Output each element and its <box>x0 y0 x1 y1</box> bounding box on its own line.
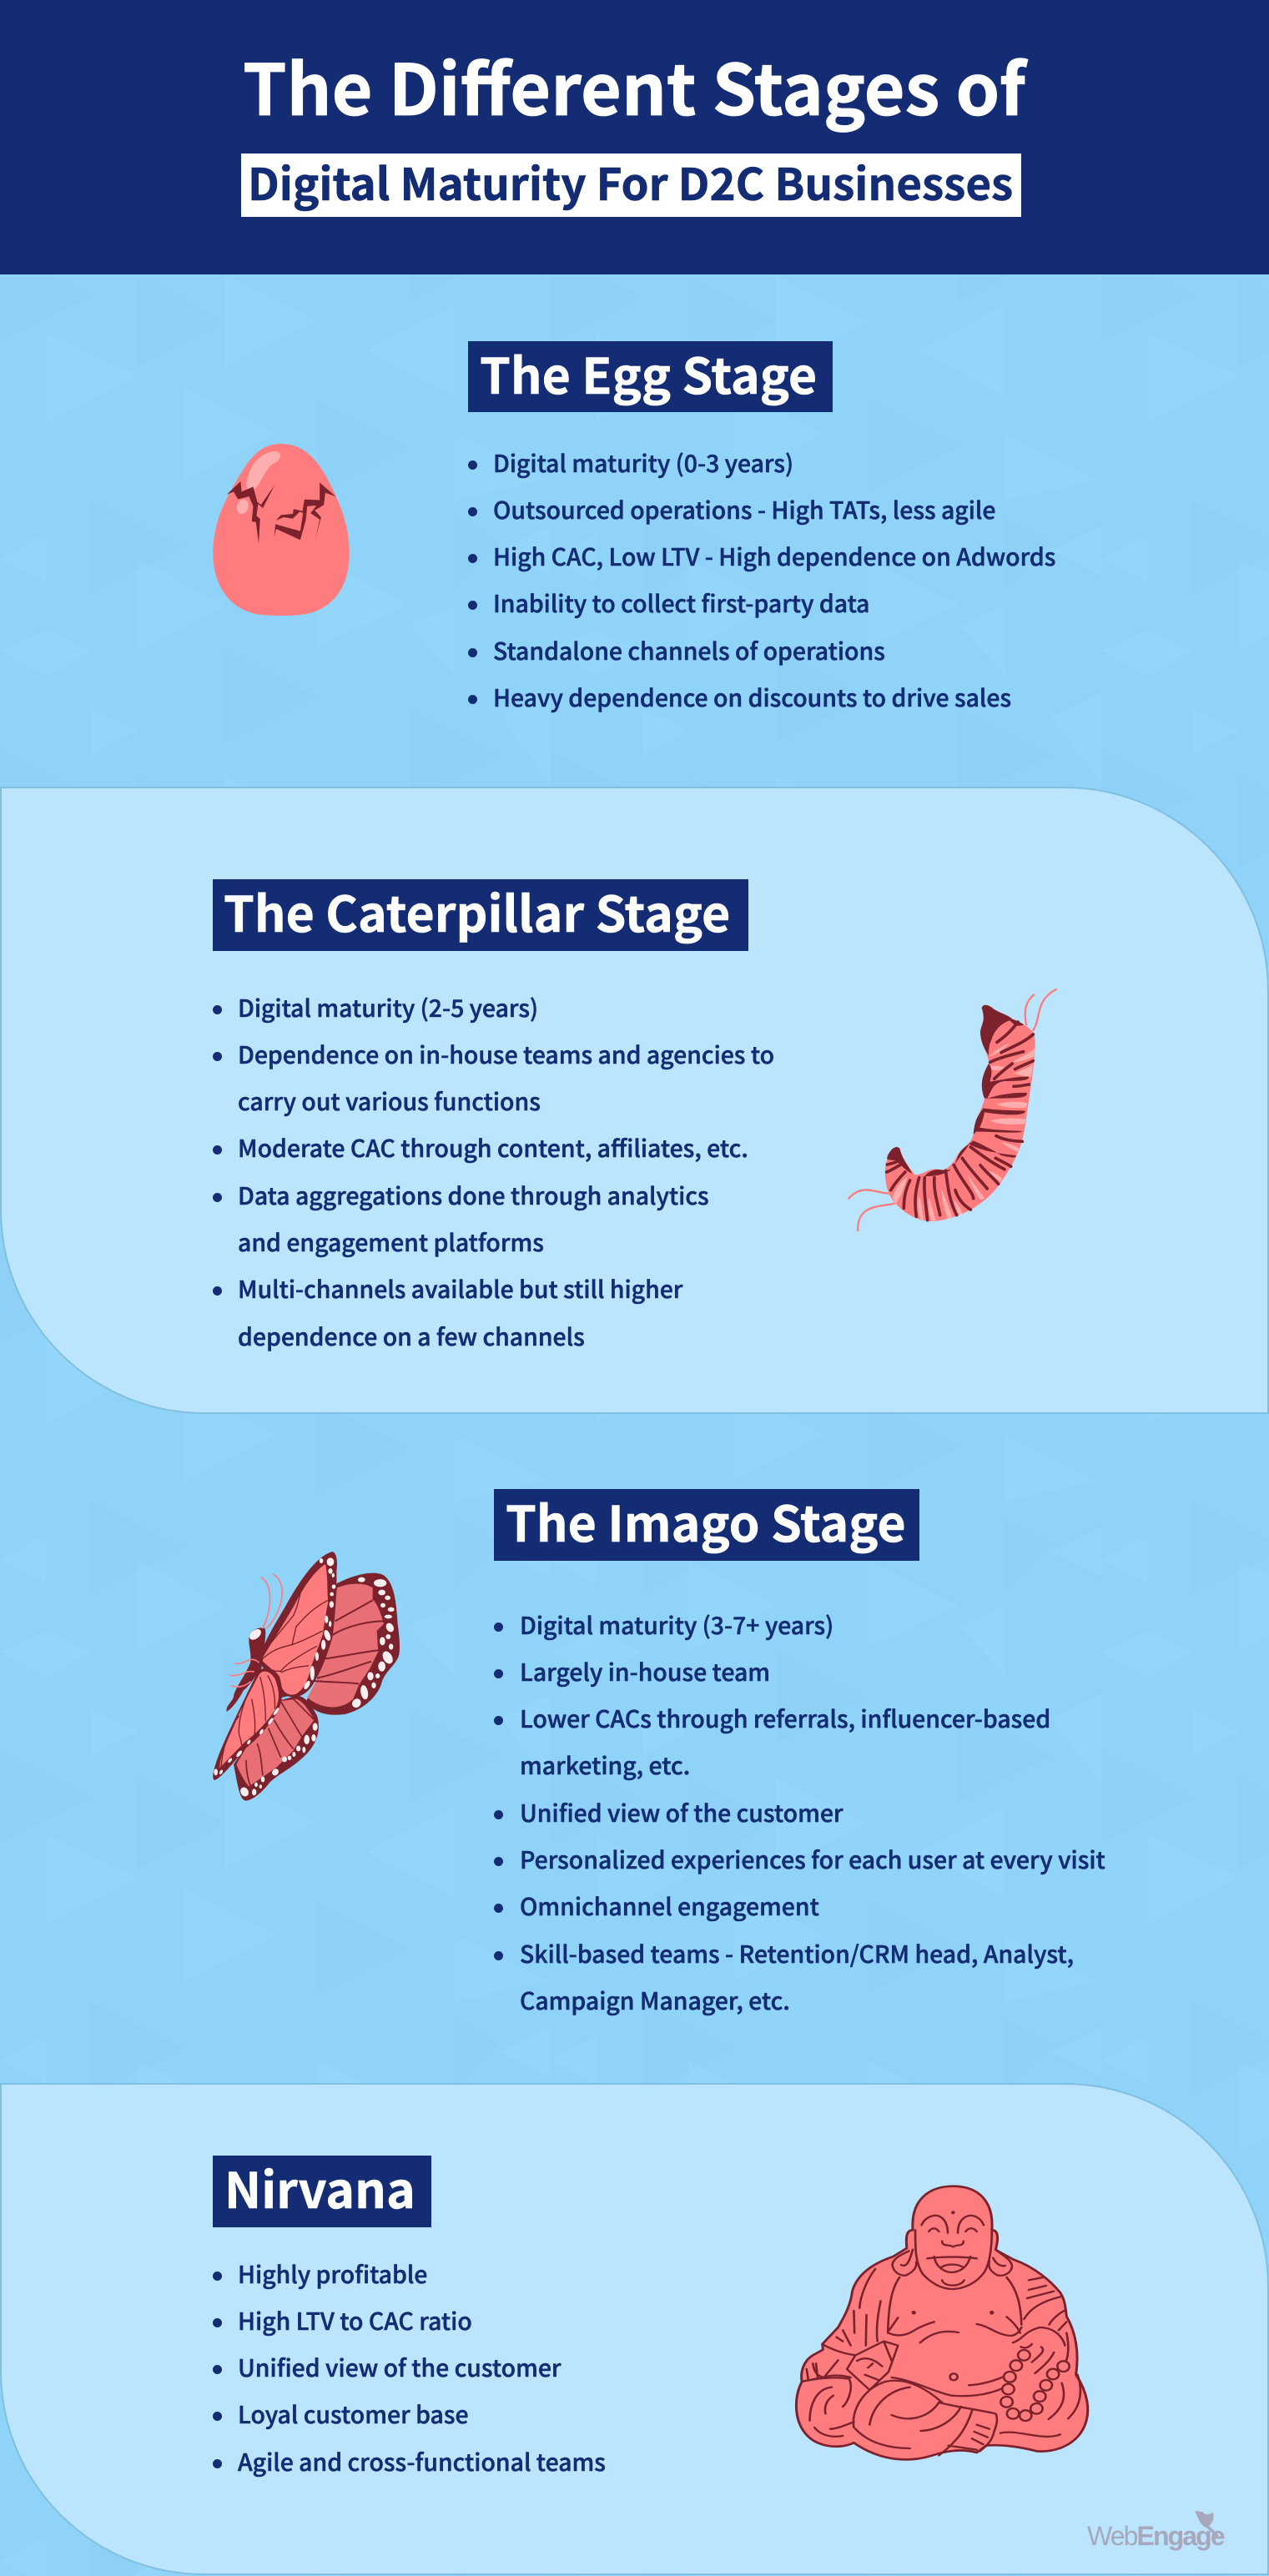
bullet: Omnichannel engagement <box>520 1889 819 1923</box>
bullet: Dependence on in-house teams and agencies to <box>238 1037 774 1071</box>
bullet <box>213 1172 774 1265</box>
bullet: dependence on a few channels <box>238 1319 585 1353</box>
bullet: Standalone channels of operations <box>493 633 885 667</box>
bullet: Digital maturity (3-7+ years) <box>520 1607 833 1642</box>
bullet: Moderate CAC through content, affiliates, etc. <box>238 1130 748 1165</box>
heading: imago stage: The Imago Stage <box>506 1485 906 1556</box>
heading: caterpillar stage: The Caterpillar Stage <box>224 875 730 946</box>
icon: butterfly <box>213 1552 400 1800</box>
bullet: and engagement platforms <box>238 1225 544 1259</box>
bullet <box>494 1695 1105 1789</box>
bullet: Lower CACs through referrals, influencer-based <box>520 1701 1050 1735</box>
title: The Different Stages of <box>243 34 1025 136</box>
bullet: Multi-channels available but still higher <box>238 1271 682 1306</box>
subtitle box: Digital Maturity For D2C Businesses <box>248 150 1013 214</box>
bullet <box>213 1031 774 1124</box>
icon: cracked egg <box>213 444 350 616</box>
bullet: Data aggregations done through analytics <box>238 1178 709 1212</box>
bullet list: imago stage <box>494 1607 1105 2017</box>
bullet list: caterpillar stage <box>213 989 774 1353</box>
icon: laughing buddha <box>794 2185 1090 2461</box>
bullet <box>494 1930 1105 2024</box>
bullet: High LTV to CAC ratio <box>238 2303 472 2337</box>
panel: the egg stage <box>213 337 1055 714</box>
bullet: Highly profitable <box>238 2256 427 2291</box>
bullet: Campaign Manager, etc. <box>520 1983 790 2017</box>
bullet: Personalized experiences for each user at every visit <box>520 1842 1105 1876</box>
fore wing upper <box>259 1552 337 1698</box>
hind wing right <box>306 1573 400 1715</box>
bullet list: nirvana <box>213 2256 606 2478</box>
bullet: Outsourced operations - High TATs, less agile <box>493 492 995 526</box>
logo: WebEngage: WebEngage <box>1087 2521 1225 2551</box>
hind wing lower <box>234 1696 319 1801</box>
bullet: Unified view of the customer <box>520 1795 843 1829</box>
bullet: Digital maturity (0-3 years) <box>493 445 793 479</box>
bullet: Digital maturity (2-5 years) <box>238 989 538 1024</box>
bullet: Skill-based teams - Retention/CRM head, Analyst, <box>520 1936 1074 1970</box>
fore wing lower <box>213 1668 282 1780</box>
panel: the imago stage <box>213 1485 1105 2017</box>
bullet: carry out various functions <box>238 1084 541 1118</box>
bullet <box>213 1265 774 1360</box>
icon: caterpillar <box>848 988 1057 1231</box>
body <box>226 1628 265 1712</box>
heading: egg stage: The Egg Stage <box>480 337 817 408</box>
bullet: marketing, etc. <box>520 1748 690 1782</box>
bullet: Unified view of the customer <box>238 2350 561 2384</box>
header banner <box>0 0 1269 274</box>
bullet: Inability to collect first-party data <box>493 586 869 620</box>
bullet: Agile and cross-functional teams <box>238 2444 606 2478</box>
wing spots <box>214 1557 395 1798</box>
panel: nirvana <box>0 2083 1269 2575</box>
bullet: Largely in-house team <box>520 1654 770 1688</box>
heading: nirvana: Nirvana <box>224 2151 415 2222</box>
bullet: High CAC, Low LTV - High dependence on Adwords <box>493 539 1055 573</box>
panel: the caterpillar stage <box>0 787 1269 1414</box>
bullet: Heavy dependence on discounts to drive sales <box>493 680 1011 714</box>
bullet: Loyal customer base <box>238 2397 469 2431</box>
bullet list: egg stage <box>468 445 1055 714</box>
